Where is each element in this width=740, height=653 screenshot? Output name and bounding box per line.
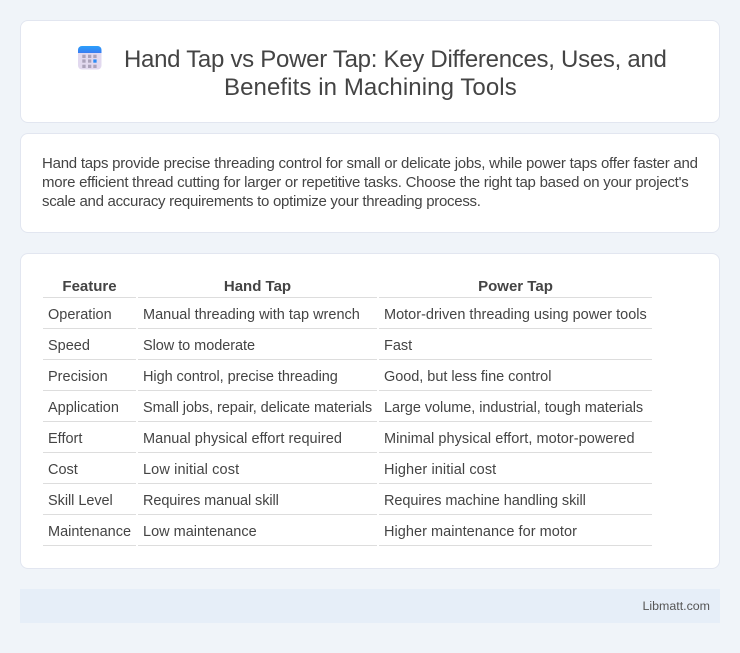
row: Operation: Manual threading with tap wrench: [143, 307, 360, 323]
row: Skill Level: Skill Level: [48, 493, 113, 509]
row: Speed: Speed: [48, 338, 90, 354]
row: Cost: Cost: [48, 462, 78, 478]
row: Operation: [48, 307, 647, 323]
panel: comparison table: [20, 253, 720, 569]
intro paragraph: Hand taps provide precise threading control for small or delicate jobs, while power taps offer faster and: [42, 155, 698, 172]
header: Hand Tap: Hand Tap: [224, 278, 291, 295]
row: Cost: [48, 462, 496, 478]
title: [124, 46, 667, 101]
intro paragraph: [42, 155, 698, 210]
row: Maintenance: Higher maintenance for motor: [384, 524, 577, 540]
footer bar: [20, 589, 720, 623]
title: Hand Tap vs Power Tap: Key Differences, Uses, and: [124, 46, 667, 73]
row: Maintenance: Low maintenance: [143, 524, 257, 540]
row: Speed: Slow to moderate: [143, 338, 255, 354]
footer text: Libmatt.com: [643, 599, 710, 613]
row: Precision: [48, 369, 551, 385]
panel: intro text: [20, 133, 720, 233]
intro paragraph: more efficient thread cutting for larger or repetitive tasks. Choose the right tap based on your project's: [42, 174, 688, 191]
row: Skill Level: Requires manual skill: [143, 493, 279, 509]
row: Cost: Higher initial cost: [384, 462, 496, 478]
header: Power Tap: Power Tap: [478, 278, 553, 295]
row: Application: Application: [48, 400, 119, 416]
row: Operation: Operation: [48, 307, 112, 323]
header: Feature: Feature: [62, 278, 117, 295]
row: Maintenance: [48, 524, 577, 540]
row: Precision: Precision: [48, 369, 108, 385]
row: Skill Level: [48, 493, 586, 509]
icon: calendar: [78, 46, 102, 70]
row: Skill Level: Requires machine handling skill: [384, 493, 586, 509]
row: Application: Large volume, industrial, tough materials: [384, 400, 643, 416]
row: Application: Small jobs, repair, delicate materials: [143, 400, 372, 416]
row: Maintenance: Maintenance: [48, 524, 131, 540]
row: Speed: [48, 338, 412, 354]
row: Precision: High control, precise threading: [143, 369, 338, 385]
row: Effort: [48, 431, 635, 447]
intro paragraph: scale and accuracy requirements to optimize your threading process.: [42, 193, 481, 210]
row: Speed: Fast: [384, 338, 412, 354]
row: Application: [48, 400, 643, 416]
row: Cost: Low initial cost: [143, 462, 239, 478]
row: Precision: Good, but less fine control: [384, 369, 551, 385]
row: Effort: Effort: [48, 431, 82, 447]
title: Benefits in Machining Tools: [224, 74, 517, 101]
row: Effort: Manual physical effort required: [143, 431, 342, 447]
row: Effort: Minimal physical effort, motor-powered: [384, 431, 635, 447]
panel: title card: [20, 20, 720, 123]
row: Operation: Motor-driven threading using power tools: [384, 307, 647, 323]
